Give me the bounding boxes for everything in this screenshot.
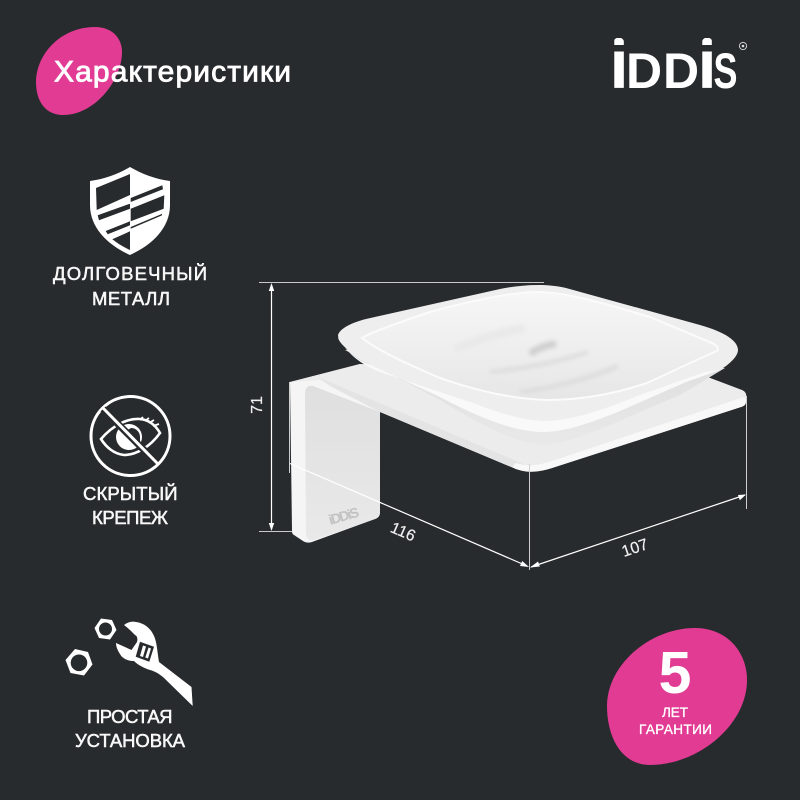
logo: iDDiS: D [663,43,699,99]
label: СКРЫТЫЙ КРЕПЕЖ: КРЕПЕЖ [92,507,168,528]
number 5: 5 [659,640,691,706]
mounting plate [290,364,747,472]
logo: iDDiS [610,26,747,103]
label: ЛЕТ ГАРАНТИИ: ГАРАНТИИ [639,722,712,737]
wrench [116,622,193,706]
heading: Характеристики [36,27,291,115]
label: ЛЕТ ГАРАНТИИ [639,705,712,737]
label: ПРОСТАЯ УСТАНОВКА [75,706,186,751]
dish rim [338,285,738,432]
dimension: depth 116: 116 [388,520,418,545]
logo: iDDiS: i [610,26,629,103]
icon: nuts and wrench [66,618,193,706]
label: ДОЛГОВЕЧНЫЙ МЕТАЛЛ: МЕТАЛЛ [92,288,170,309]
label: ДОЛГОВЕЧНЫЙ МЕТАЛЛ [53,263,207,309]
logo: iDDiS: D [626,43,662,99]
label: ДОЛГОВЕЧНЫЙ МЕТАЛЛ: ДОЛГОВЕЧНЫЙ [53,263,207,284]
label: ЛЕТ ГАРАНТИИ: ЛЕТ [662,705,688,720]
label: СКРЫТЫЙ КРЕПЕЖ [83,483,178,528]
dish basin ridges [455,328,618,392]
logo: iDDiS: S [714,43,738,99]
dimension: width 107 [530,396,746,570]
feature: durable metal [53,167,207,309]
dimension: height 71: 71 [249,396,266,414]
dish underside [345,340,725,445]
label: ПРОСТАЯ УСТАНОВКА: УСТАНОВКА [75,730,186,751]
dish rim front highlight [338,337,720,432]
pink blob [607,628,747,765]
nut large [66,649,92,676]
product: soap dish with bracket [290,285,747,543]
label: ПРОСТАЯ УСТАНОВКА: ПРОСТАЯ [87,706,172,727]
heading: Характеристики: Характеристики [54,56,291,88]
icon: shield [90,167,170,255]
embossed logo on block: iDDiS [327,504,361,528]
dimension: height 71 [249,282,544,532]
logo: iDDiS: i [698,26,717,103]
icon: crossed eye [91,396,170,476]
dimension: depth 116 [290,382,529,567]
pink blob behind heading [36,27,122,115]
warranty badge [607,628,747,765]
dish basin [362,292,718,400]
feature: easy installation [66,618,193,751]
label: СКРЫТЫЙ КРЕПЕЖ: СКРЫТЫЙ [83,483,178,504]
dimension: width 107: 107 [620,536,651,561]
wall block [290,364,420,543]
nut small [94,618,116,640]
feature: hidden fastening [83,396,178,528]
